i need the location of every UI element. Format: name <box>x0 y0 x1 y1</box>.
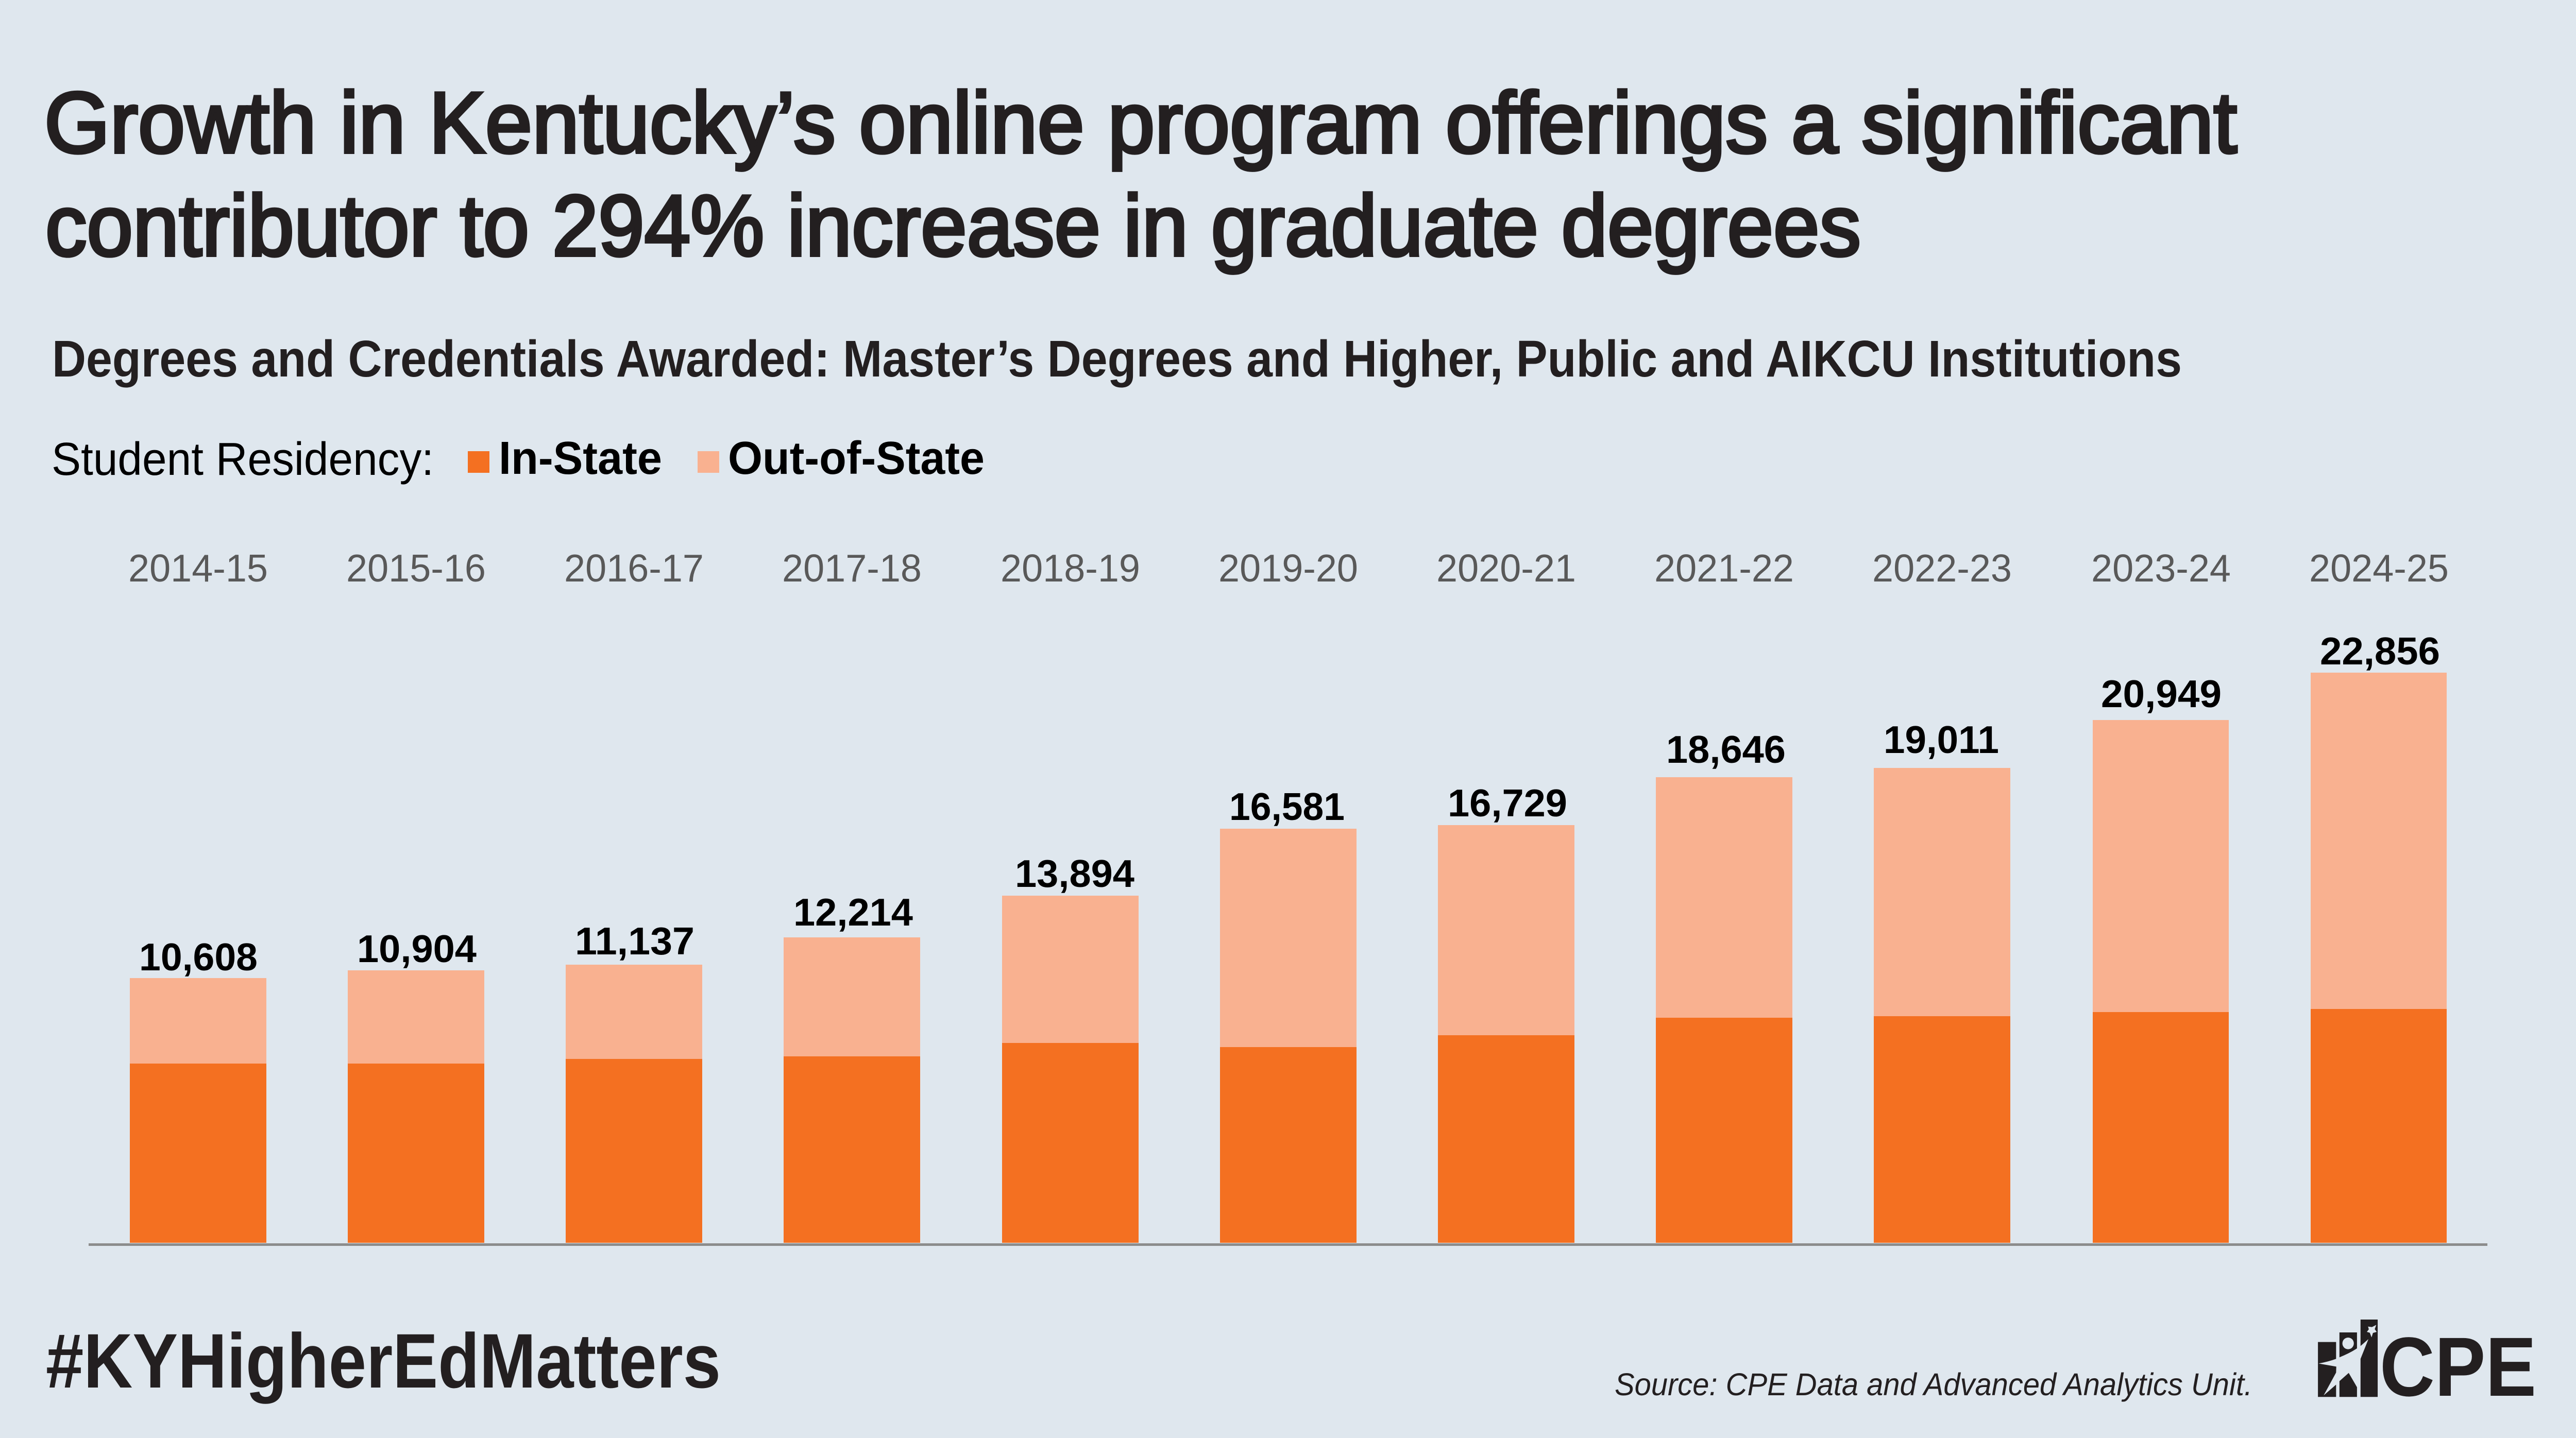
value labels: 16,581 <box>1229 785 1345 828</box>
year labels: 2016-17 <box>564 546 704 590</box>
bar: 2021-22 <box>1656 777 1792 1243</box>
legend label: Student Residency: <box>52 434 434 485</box>
logo wordmark: CPE <box>2380 1320 2536 1414</box>
logo icon: bars with star figure <box>2318 1320 2378 1397</box>
value labels: 13,894 <box>1015 852 1134 895</box>
value labels: 22,856 <box>2320 629 2440 673</box>
year labels <box>128 546 2449 590</box>
value labels <box>139 629 2440 979</box>
value labels: 11,137 <box>575 919 694 963</box>
legend text: out-of-state: Out-of-State <box>728 433 985 484</box>
value labels: 18,646 <box>1666 728 1786 771</box>
year labels: 2018-19 <box>1001 546 1140 590</box>
legend <box>52 433 985 485</box>
legend swatch: out-of-state <box>698 451 719 473</box>
value labels: 12,214 <box>793 891 913 934</box>
year labels: 2019-20 <box>1218 546 1358 590</box>
hashtag: #KYHigherEdMatters <box>46 1317 721 1404</box>
year labels: 2020-21 <box>1436 546 1576 590</box>
stacked bar chart <box>130 673 2447 1243</box>
bar: 2015-16 <box>348 970 484 1243</box>
bar: 2024-25 <box>2311 673 2447 1243</box>
year labels: 2017-18 <box>782 546 922 590</box>
value labels: 10,608 <box>139 935 258 979</box>
year labels: 2014-15 <box>128 546 268 590</box>
bar: 2020-21 <box>1438 825 1574 1243</box>
value labels: 20,949 <box>2101 672 2222 715</box>
value labels: 16,729 <box>1448 781 1567 825</box>
bar: 2022-23 <box>1874 768 2010 1243</box>
year labels: 2024-25 <box>2309 546 2449 590</box>
x axis line <box>89 1243 2487 1246</box>
year labels: 2015-16 <box>346 546 486 590</box>
bar: 2014-15 <box>130 978 266 1243</box>
legend swatch: in-state <box>468 451 489 473</box>
bar: 2017-18 <box>784 937 920 1243</box>
bar: 2018-19 <box>1002 896 1139 1243</box>
legend text: in-state: In-State <box>499 433 662 484</box>
bar: 2016-17 <box>566 965 702 1243</box>
subtitle: Degrees and Credentials Awarded: Master’s Degrees and Higher, Public and AIKCU Institutions <box>52 330 2182 388</box>
title: Growth in Kentucky’s online program offerings a significant <box>44 74 2237 171</box>
year labels: 2023-24 <box>2091 546 2231 590</box>
title <box>44 74 2237 274</box>
year labels: 2022-23 <box>1872 546 2012 590</box>
year labels: 2021-22 <box>1654 546 1794 590</box>
title: contributor to 294% increase in graduate degrees <box>45 177 1861 274</box>
bar: 2023-24 <box>2093 720 2229 1243</box>
logo: CPE <box>2318 1320 2536 1414</box>
bar: 2019-20 <box>1220 829 1357 1243</box>
source note: Source: CPE Data and Advanced Analytics Unit. <box>1615 1367 2252 1402</box>
value labels: 19,011 <box>1884 718 1999 761</box>
value labels: 10,904 <box>357 927 477 970</box>
